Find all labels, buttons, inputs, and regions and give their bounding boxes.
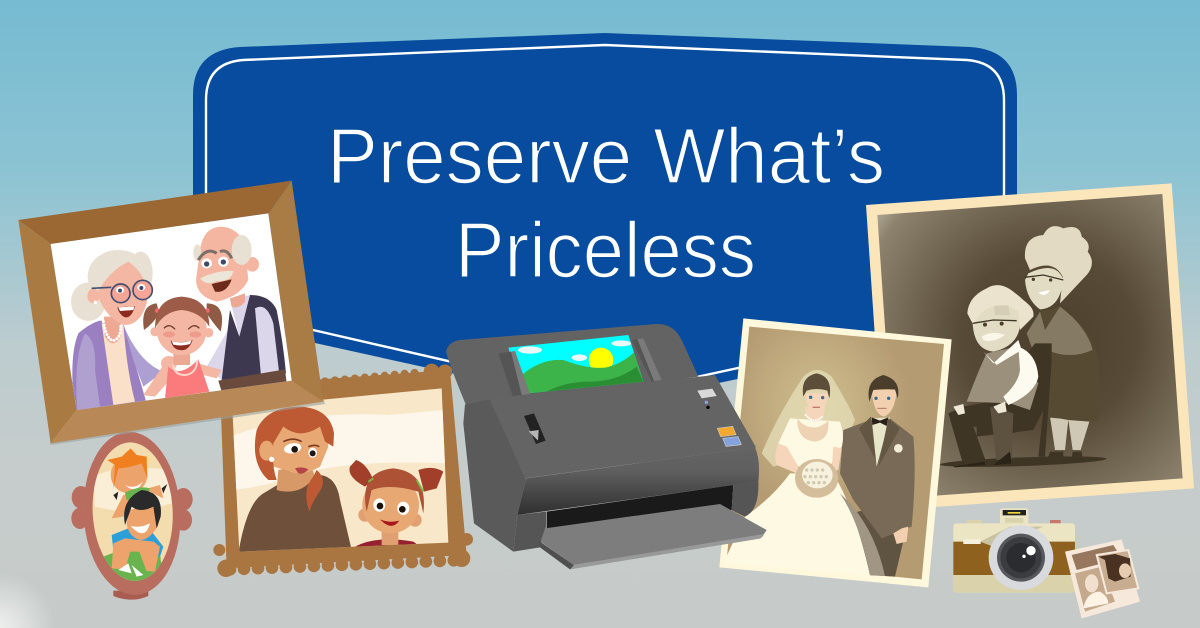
output slot xyxy=(547,485,733,529)
chair xyxy=(977,343,1052,457)
floor shadow xyxy=(940,454,1107,469)
frame: grandparents and granddaughter xyxy=(18,181,325,445)
title: Preserve What's Priceless: Preserve What’s xyxy=(327,111,885,200)
bride veil xyxy=(762,370,855,467)
photo: sepia elderly couple xyxy=(866,183,1194,510)
groom xyxy=(840,375,915,577)
bride xyxy=(723,373,885,576)
scanner back housing xyxy=(446,324,698,407)
icon: vintage camera xyxy=(953,508,1075,593)
control buttons xyxy=(697,389,741,446)
father xyxy=(112,490,163,577)
frame: oval portrait of father and son xyxy=(71,429,193,600)
output tray xyxy=(541,504,767,565)
granddaughter xyxy=(143,297,222,398)
scanner front face xyxy=(490,375,756,478)
title: Preserve What's Priceless: Priceless xyxy=(455,205,756,294)
grandmother xyxy=(71,250,163,413)
daughter xyxy=(349,460,443,547)
title: Preserve What's Priceless xyxy=(327,111,885,294)
grandfather xyxy=(193,227,287,392)
mother xyxy=(238,407,352,553)
icon: stack of old snapshots xyxy=(1065,539,1140,618)
photo: bride and groom xyxy=(719,318,952,587)
frame: mother and daughter xyxy=(213,364,473,577)
elderly woman xyxy=(1025,226,1100,459)
scanner side xyxy=(463,399,526,552)
front lip xyxy=(517,447,759,515)
elderly man xyxy=(948,285,1038,467)
scanned landscape picture xyxy=(508,335,644,394)
side slider xyxy=(524,413,546,444)
son on shoulders xyxy=(107,448,167,518)
panel: blue title sign xyxy=(193,33,1017,407)
icon: document scanner xyxy=(446,324,767,569)
paper guides xyxy=(498,338,662,396)
